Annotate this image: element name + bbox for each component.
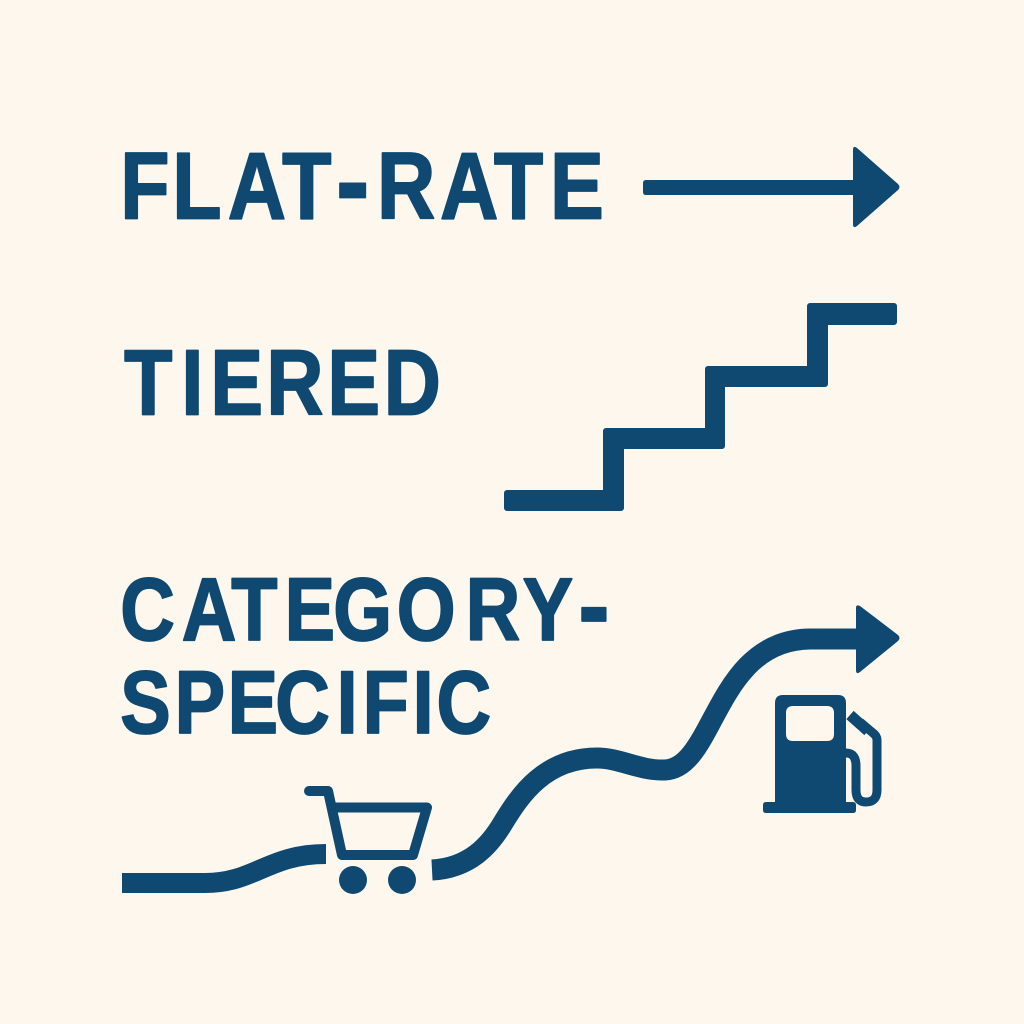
icon: rising stair steps (507, 306, 894, 508)
heading: flat-rate: RATE (377, 132, 604, 239)
heading: category-specific: - (578, 544, 609, 667)
arrow: flat straight line (643, 147, 900, 227)
heading: category-specific: SPECIFIC (120, 652, 491, 752)
heading: flat-rate: FLAT (120, 132, 331, 239)
icon: fuel pump (763, 695, 877, 813)
heading: flat-rate: - (336, 115, 369, 247)
arrow: category wavy line rising (432, 605, 900, 870)
curve: category line start (122, 854, 326, 883)
icon: shopping cart (309, 791, 427, 894)
heading: category-specific: CATEGORY (120, 559, 573, 659)
heading: category-specific (120, 544, 609, 752)
heading: tiered: TIERED (124, 332, 441, 435)
